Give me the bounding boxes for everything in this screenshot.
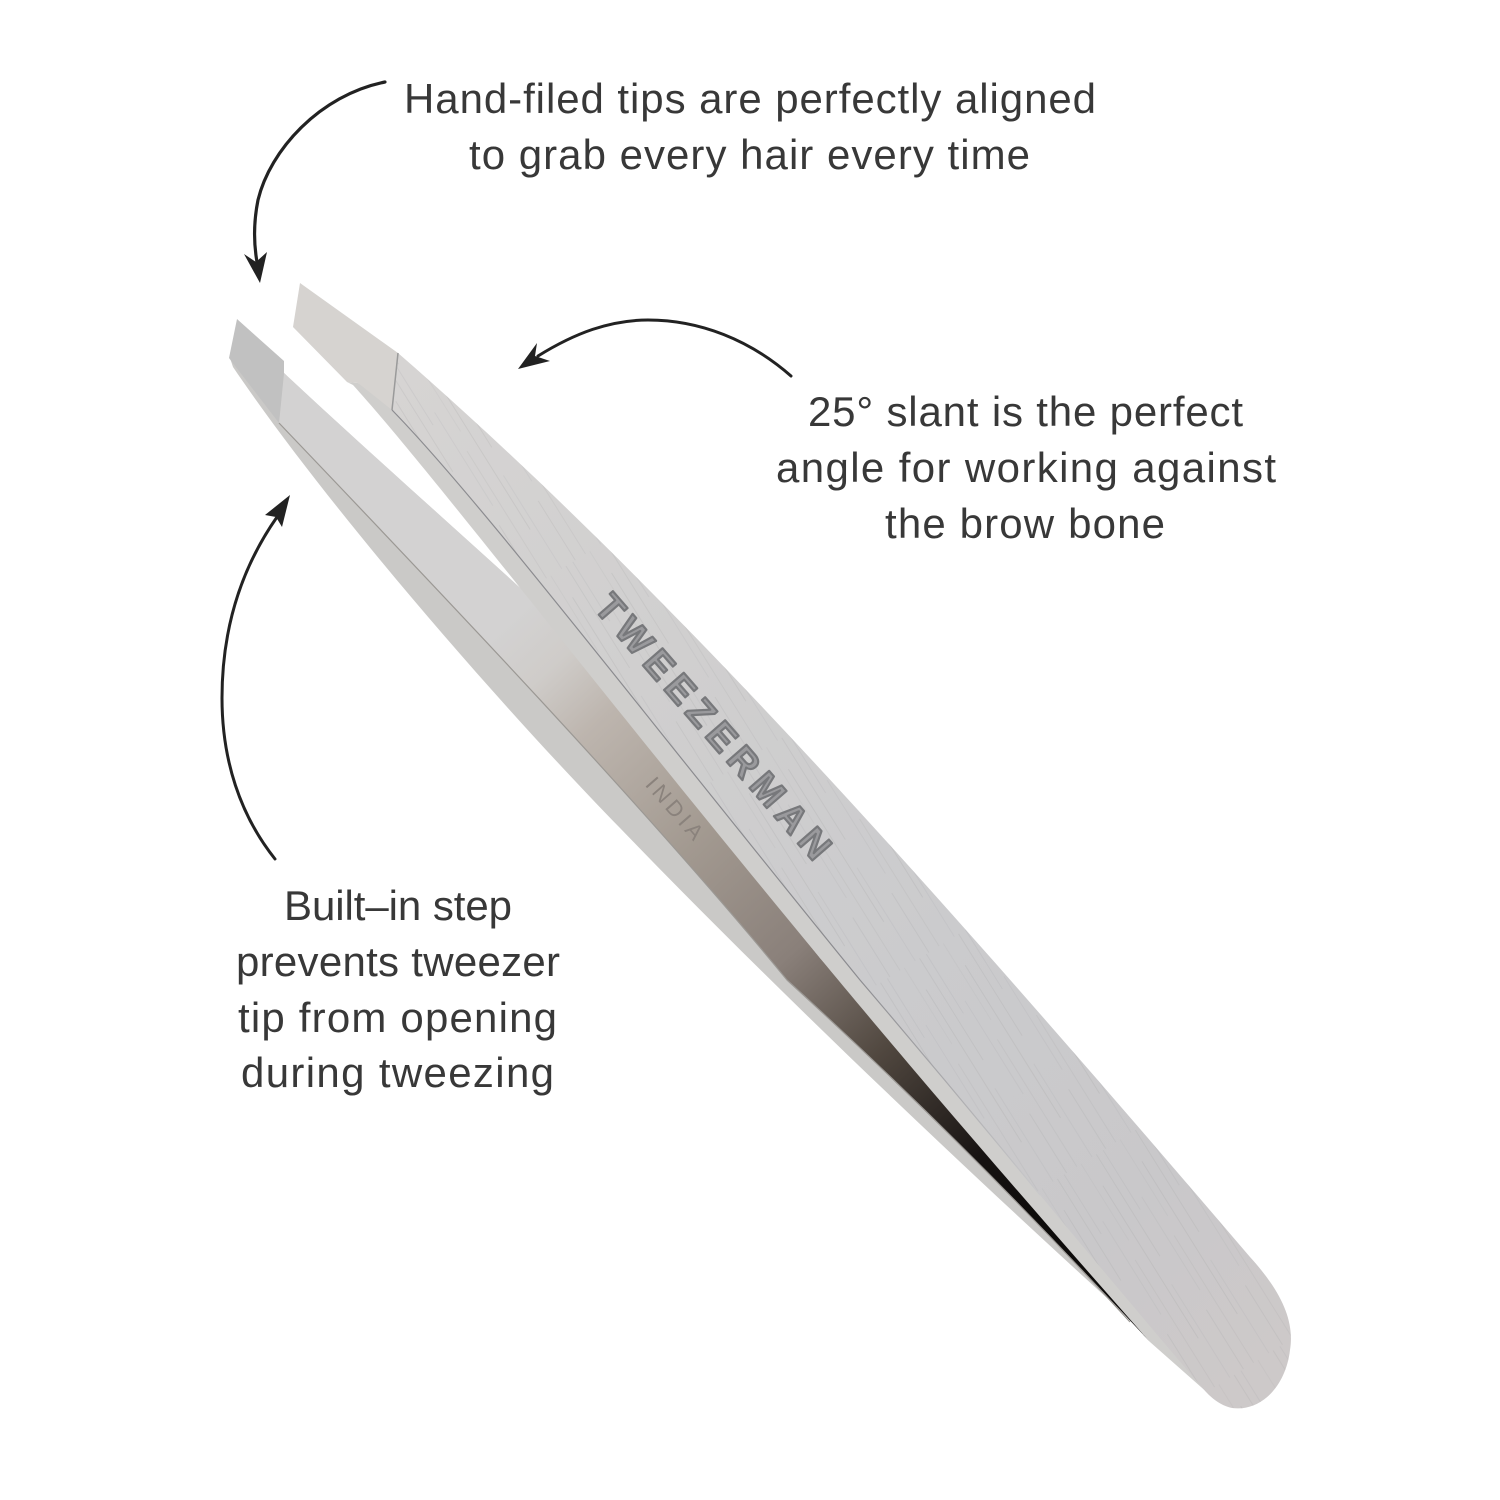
- blade ridge line: [392, 410, 1040, 1195]
- callout text: built-in step: tip from opening: [238, 994, 557, 1041]
- lower blade outer band: [230, 358, 1230, 1397]
- callout text: built-in step: Built–in step: [284, 882, 512, 929]
- embossed brand name: TWEEZERMAN: [586, 586, 839, 868]
- callout text: built-in step: during tweezing: [241, 1049, 554, 1096]
- tweezer illustration: [229, 283, 1291, 1408]
- callout text: hand-filed tips: [404, 75, 1096, 178]
- callout text: 25 degree slant: the brow bone: [885, 500, 1165, 547]
- engraved mark: INDIA: INDIA: [641, 772, 709, 845]
- upper blade main face and handle: [392, 353, 1291, 1408]
- arrow: to the built-in step: [222, 495, 290, 859]
- callout text: built-in step: prevents tweezer: [236, 938, 560, 985]
- callout text: 25 degree slant: [776, 388, 1276, 547]
- upper blade ridge band: [347, 382, 1210, 1395]
- callout text: 25 degree slant: angle for working against: [776, 444, 1276, 491]
- lower blade band edge line: [279, 423, 1130, 1322]
- callout text: built-in step: [236, 882, 560, 1096]
- arrow: to the tips: [244, 82, 385, 283]
- lower blade slanted tip facet: [229, 319, 284, 423]
- callout text: 25 degree slant: 25° slant is the perfect: [808, 388, 1243, 435]
- lower blade inner face with shadow: [279, 373, 1150, 1342]
- callout text: hand-filed tips: Hand-filed tips are perfectly aligned: [404, 75, 1096, 122]
- upper blade slanted tip: [293, 283, 398, 410]
- arrow: to the slant: [518, 320, 791, 376]
- brushed steel texture: [392, 353, 1291, 1408]
- tip step line: [392, 353, 398, 410]
- callout text: hand-filed tips: to grab every hair every time: [469, 131, 1030, 178]
